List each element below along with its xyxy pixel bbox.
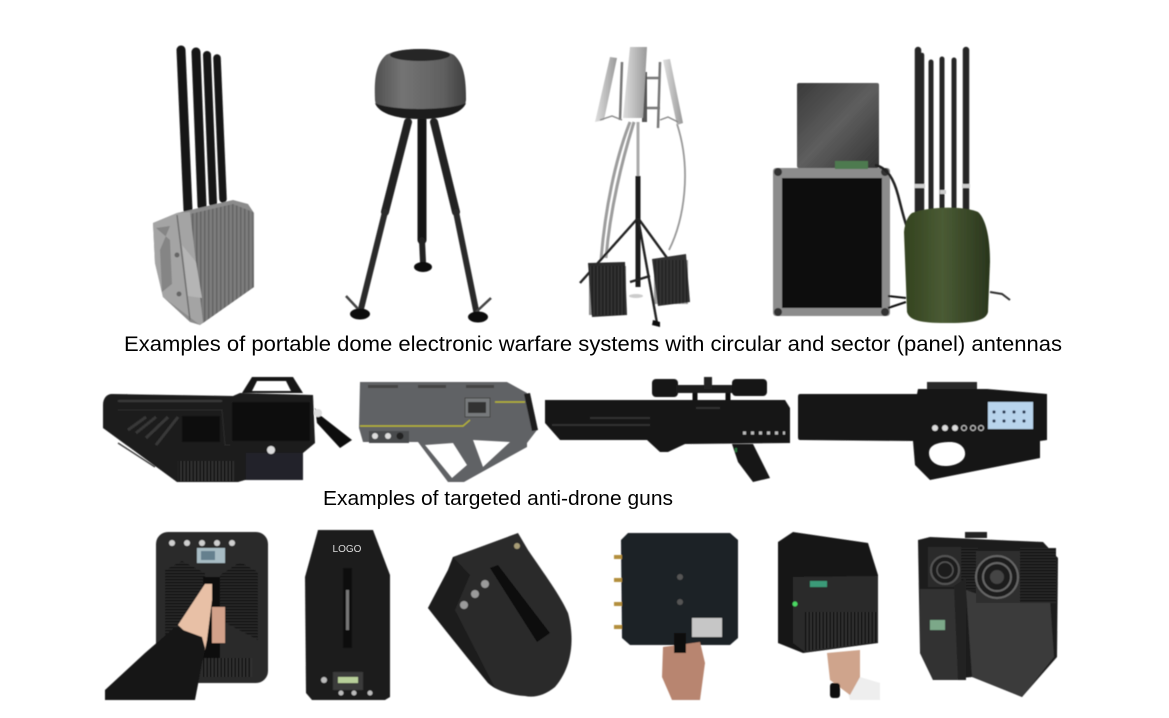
device: black anti-drone gun with rifle scope <box>545 377 790 482</box>
device: black anti-drone gun with carry handle <box>103 377 352 482</box>
device: handheld shield jammer held in hand <box>105 532 268 700</box>
caption: dome systems: Examples of portable dome electronic warfare systems with circular and sector (panel) antennas <box>124 332 1062 356</box>
device: dual fan jammer <box>918 532 1058 697</box>
device: flat panel antenna with flight case and green backpack jammer <box>773 50 1010 323</box>
logo label on shield: LOGO <box>333 544 362 555</box>
device: angled shield jammer <box>428 533 572 697</box>
device: sector panel antennas on tripod mast <box>580 47 690 327</box>
device: jammer box with four antennas <box>153 50 254 325</box>
device: shield jammer with logo <box>305 530 390 700</box>
device: square panel jammer with hand <box>614 533 738 700</box>
caption: anti-drone guns: Examples of targeted anti-drone guns <box>323 488 673 510</box>
device: box jammer on back plate with hand <box>778 532 880 700</box>
device: dome antenna on tripod <box>346 49 491 322</box>
device: grey anti-drone gun with yellow stripe <box>359 382 538 482</box>
device: black anti-drone gun with touch screen <box>798 382 1047 480</box>
